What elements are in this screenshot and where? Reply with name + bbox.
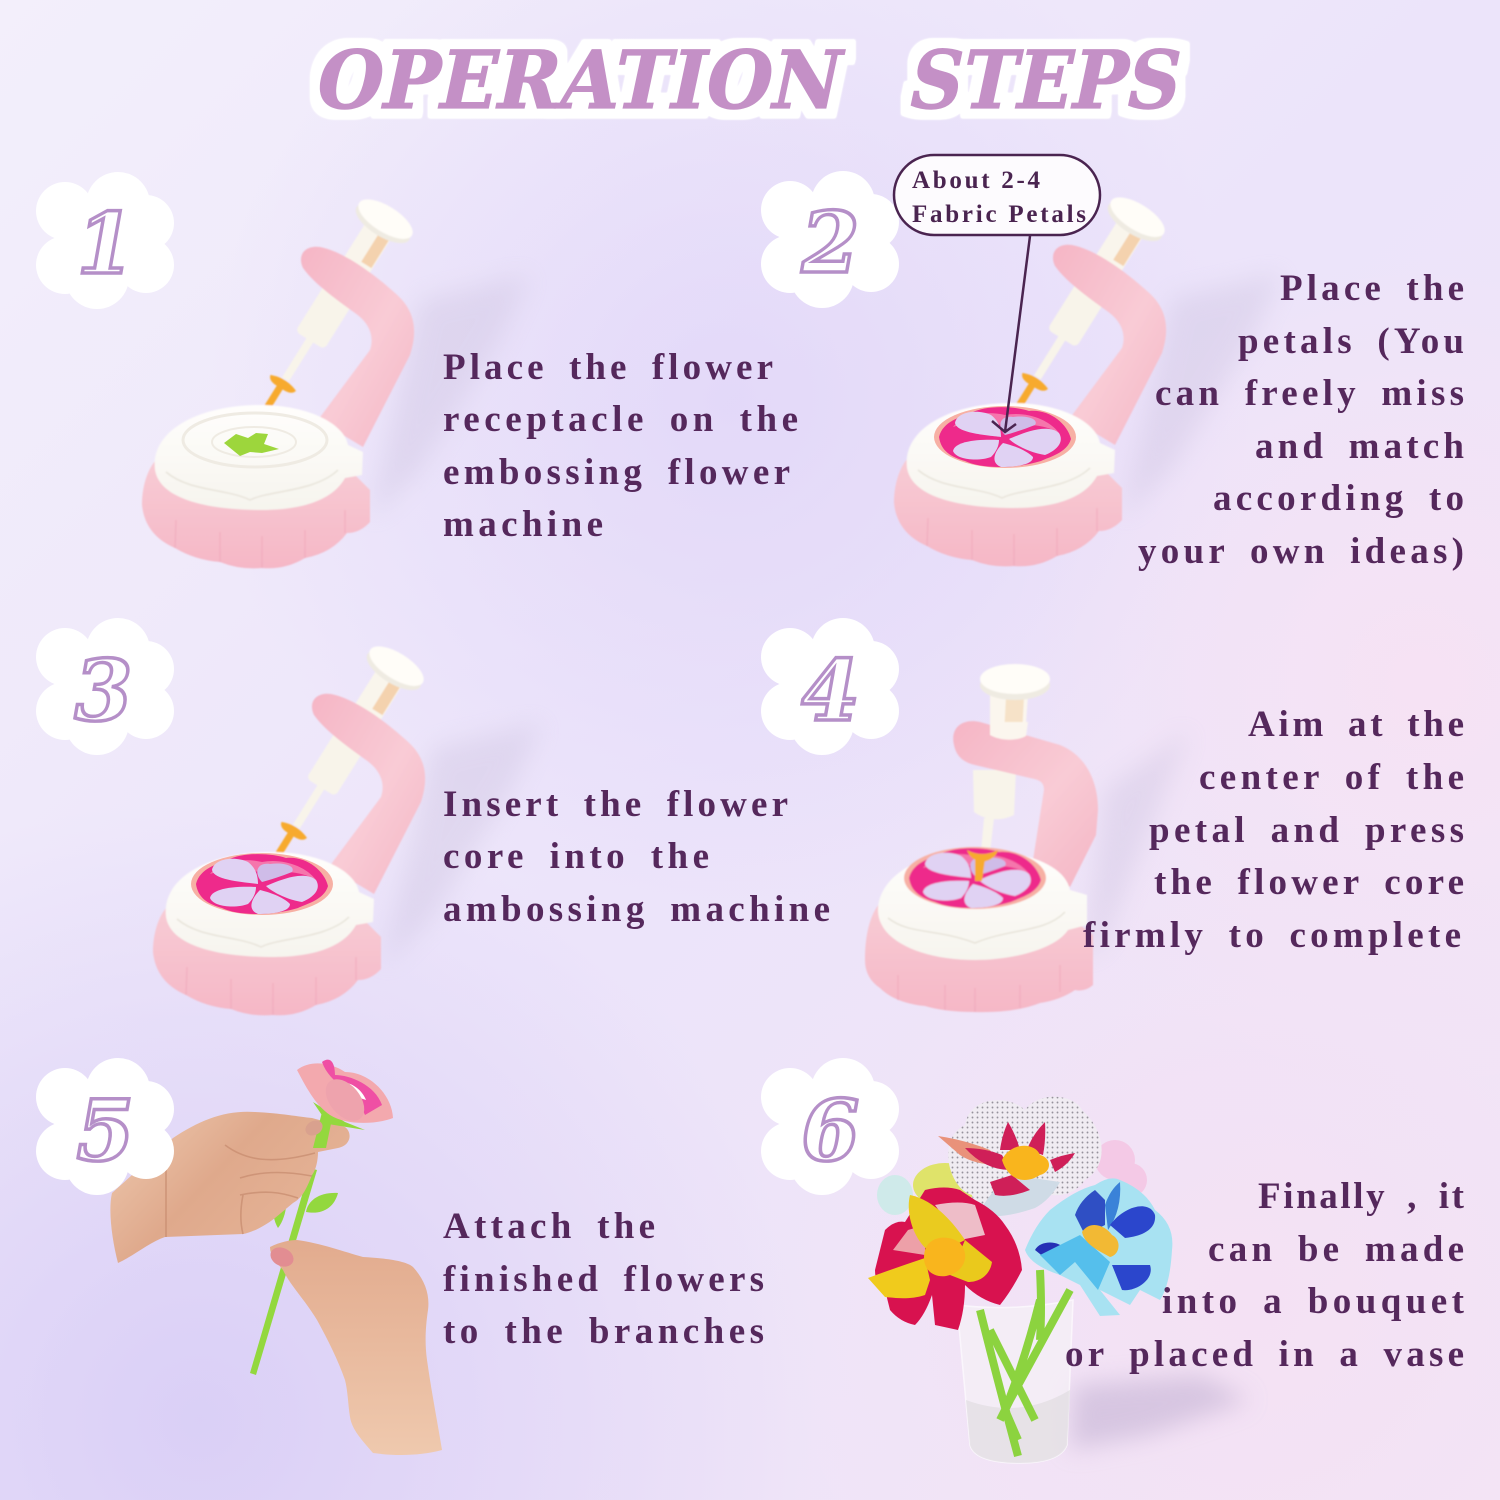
step 4 text: center of the: [1199, 757, 1464, 798]
stem with leaves: [250, 1168, 338, 1375]
step 1 text: machine: [443, 504, 603, 545]
panel: step 3: [36, 618, 830, 1015]
callout: about 2-4 fabric petals: [894, 155, 1100, 432]
step 4 text: firmly to complete: [1083, 915, 1461, 956]
step 2 text: petals (You: [1238, 321, 1464, 362]
step 4 text: the flower core: [1154, 862, 1464, 903]
number badge 5: 5: [67, 1082, 143, 1180]
step 4 text: Aim at the: [1248, 704, 1464, 745]
callout: about 2-4 fabric petals: Fabric Petals: [912, 201, 1086, 228]
machine shadow: [1085, 730, 1190, 960]
step 5 text: to the branches: [443, 1311, 764, 1352]
panel: step 2: [761, 155, 1464, 572]
mesh flower: [938, 1097, 1102, 1216]
step 2 text: according to: [1213, 478, 1464, 519]
step 4 text: [1083, 704, 1464, 956]
blue flower: [1025, 1178, 1172, 1316]
red and yellow flower: [868, 1188, 1022, 1330]
step 5 text: [443, 1206, 764, 1352]
number badge 4: 4: [792, 642, 868, 740]
number badge 6: 6: [792, 1082, 868, 1180]
machine shadow: [370, 275, 530, 520]
number badge 6: [761, 1058, 899, 1195]
title: OPERATION: [308, 34, 852, 128]
step 2 text: can freely miss: [1155, 373, 1464, 414]
step 2 text: Place the: [1280, 268, 1464, 309]
step 6 text: [1065, 1176, 1465, 1375]
embossing machine with flower core: [153, 639, 430, 1015]
number badge 3: [36, 618, 174, 755]
step 1 text: [443, 347, 798, 545]
number badge 3: 3: [65, 642, 141, 740]
panel: step 4: [761, 618, 1464, 1012]
hand holding flower: [110, 1112, 350, 1263]
step 3 text: core into the: [443, 836, 709, 877]
panel: step 6: [761, 1058, 1465, 1463]
fingernail: [267, 1244, 297, 1270]
number badge 2: 2: [792, 194, 868, 292]
step 5 text: Attach the: [443, 1206, 655, 1247]
number badge 2: [761, 171, 899, 308]
step 1 text: Place the flower: [443, 347, 773, 388]
hand pinching stem: [270, 1240, 442, 1455]
step 3 text: ambossing machine: [443, 889, 830, 930]
step 6 text: Finally , it: [1258, 1176, 1465, 1217]
step 6 text: into a bouquet: [1162, 1281, 1465, 1322]
step 6 text: can be made: [1208, 1229, 1464, 1270]
step 1 text: embossing flower: [443, 452, 790, 493]
number badge 1: 1: [67, 195, 143, 293]
embossing machine with fabric petals: [894, 190, 1171, 566]
step 3 text: [443, 784, 830, 930]
step 1 text: receptacle on the: [443, 399, 798, 440]
glass vase with stems: [957, 1270, 1073, 1463]
panel: step 1: [36, 172, 798, 568]
finger lines: [166, 1145, 315, 1237]
number badge 1: [36, 172, 174, 309]
number badge 4: [761, 618, 899, 755]
embossing machine with receptacle: [142, 192, 419, 568]
number badge 5: [36, 1058, 174, 1195]
step 2 text: [1138, 268, 1464, 572]
embossing machine pressing: [865, 664, 1098, 1012]
step 3 text: Insert the flower: [443, 784, 788, 825]
step 4 text: petal and press: [1149, 810, 1464, 851]
flower on stem: [297, 1060, 393, 1148]
step 5 text: finished flowers: [443, 1259, 764, 1300]
step 6 text: or placed in a vase: [1065, 1334, 1464, 1375]
vase shadow: [1070, 1375, 1250, 1450]
pale background flowers: [877, 1140, 1147, 1215]
machine shadow: [1122, 273, 1282, 518]
callout: about 2-4 fabric petals: About 2-4: [912, 167, 1040, 194]
panel: step 5: [36, 1058, 764, 1455]
machine shadow: [382, 723, 542, 968]
step 2 text: your own ideas): [1138, 531, 1464, 572]
title: STEPS: [901, 34, 1191, 128]
step 2 text: and match: [1255, 426, 1464, 467]
title: [308, 34, 1191, 128]
